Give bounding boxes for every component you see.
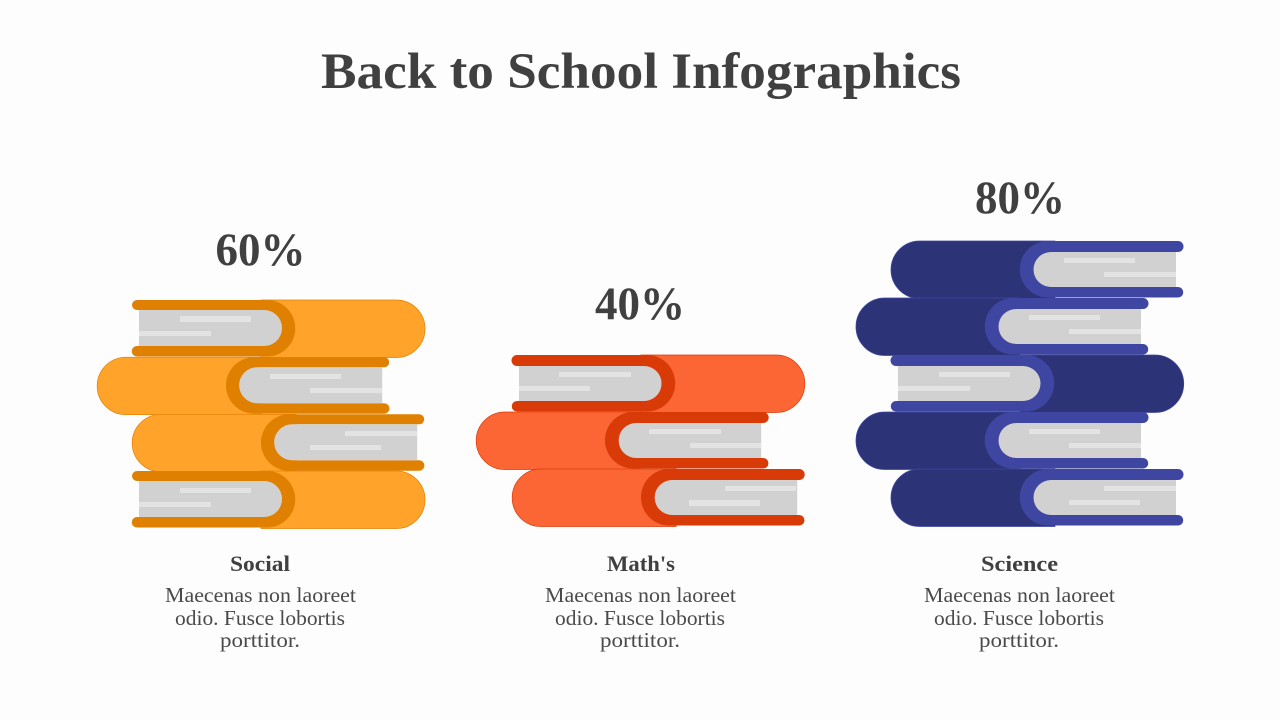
book 1 [891,241,1184,298]
description: maths: porttitor. [600,628,680,652]
text block: science [924,551,1115,652]
book 1 [512,355,805,412]
book stack: maths [476,355,805,526]
heading: maths: Math's [607,551,675,576]
description: social: Maecenas non laoreet [165,583,356,607]
book 2 [97,357,389,415]
percentage: science: 80% [975,172,1065,224]
description: maths [545,583,736,652]
text block: social [165,551,356,652]
description: maths: odio. Fusce lobortis [555,606,725,630]
book 3 [512,469,805,526]
percentage: maths: 40% [595,278,685,330]
description: social: porttitor. [220,628,300,652]
book 1 [132,300,425,358]
heading: social: Social [230,551,290,576]
description: science: odio. Fusce lobortis [934,606,1104,630]
percentage: social: 60% [216,224,306,276]
book 2 [476,412,769,470]
description: social: odio. Fusce lobortis [175,606,345,630]
heading: science: Science [981,551,1058,576]
description: science: porttitor. [979,628,1059,652]
book 4 [856,412,1148,470]
book 4 [132,471,425,528]
title: Back to School Infographics [321,44,961,100]
book stack: social [97,300,425,528]
book 3 [132,414,424,472]
text block: maths [545,551,736,652]
description: social [165,583,356,652]
book 2 [856,298,1148,356]
description: science: Maecenas non laoreet [924,583,1115,607]
book 3 [890,355,1184,412]
book 5 [891,469,1184,526]
description: maths: Maecenas non laoreet [545,583,736,607]
description: science [924,583,1115,652]
book stack: science [856,241,1184,526]
